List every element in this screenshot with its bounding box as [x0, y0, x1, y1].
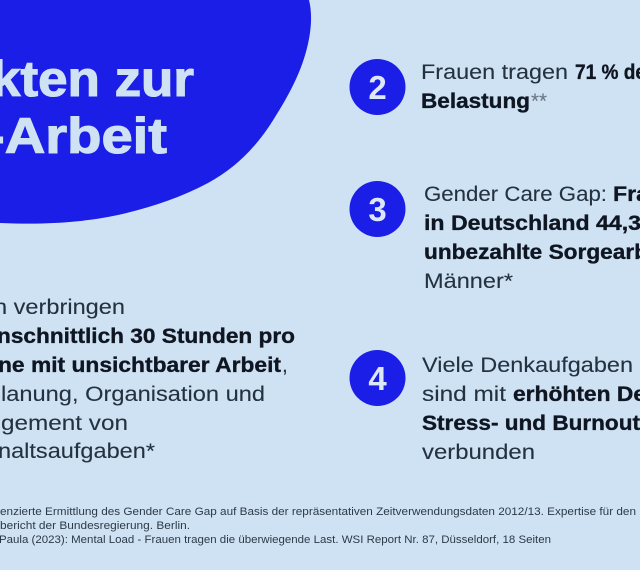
text block: point 3: Gender Care Gap:	[424, 183, 607, 206]
number badge 2: 2	[368, 69, 387, 106]
text block: point 4	[422, 354, 640, 464]
text block: point 4: Viele Denkaufgaben	[422, 354, 633, 377]
number badge 4	[350, 350, 406, 406]
text block: point 2: **	[531, 90, 547, 113]
text block: point 4: sind mit	[422, 383, 506, 406]
blue title blob	[0, 0, 311, 224]
number badge 2	[350, 59, 406, 115]
text block: point 4: Stress- und Burnout	[422, 412, 640, 435]
text block: point 2: Frauen tragen	[421, 61, 568, 84]
footnotes: bericht der Bundesregierung. Berlin.	[0, 520, 190, 532]
text block: point 4: verbunden	[422, 441, 535, 464]
text block: point 1	[0, 296, 295, 463]
text block: point 2	[421, 61, 640, 113]
text block: point 1: nschnittlich 30 Stunden pro	[0, 325, 295, 348]
text block: point 1: naltsaufgaben*	[0, 440, 155, 463]
footnotes: enzierte Ermittlung des Gender Care Gap auf Basis der repräsentativen Zeitverwendungsdaten 2012/13. Expertise für den	[0, 506, 636, 518]
text block: point 4: erhöhten De	[513, 383, 640, 406]
text block: point 1: ,	[282, 354, 288, 377]
footnotes: Paula (2023): Mental Load - Frauen tragen die überwiegende Last. WSI Report Nr. 87, Düsseldorf, 18 Seiten	[0, 534, 551, 546]
number badge 3: 3	[368, 191, 387, 228]
footnotes	[0, 506, 636, 546]
text block: point 2: Belastung	[421, 90, 530, 113]
text block: point 3: Männer*	[424, 270, 513, 293]
title	[0, 51, 194, 164]
number badge 4: 4	[368, 360, 387, 397]
text block: point 3: unbezahlte Sorgearb	[424, 241, 640, 264]
text block: point 3: in Deutschland 44,3	[424, 212, 640, 235]
text block: point 1: lanung, Organisation und	[1, 383, 265, 406]
text block: point 3	[424, 183, 640, 293]
text block: point 1: ne mit unsichtbarer Arbeit	[0, 354, 281, 377]
text block: point 1: gement von	[1, 412, 128, 435]
number badge 3	[350, 181, 406, 237]
